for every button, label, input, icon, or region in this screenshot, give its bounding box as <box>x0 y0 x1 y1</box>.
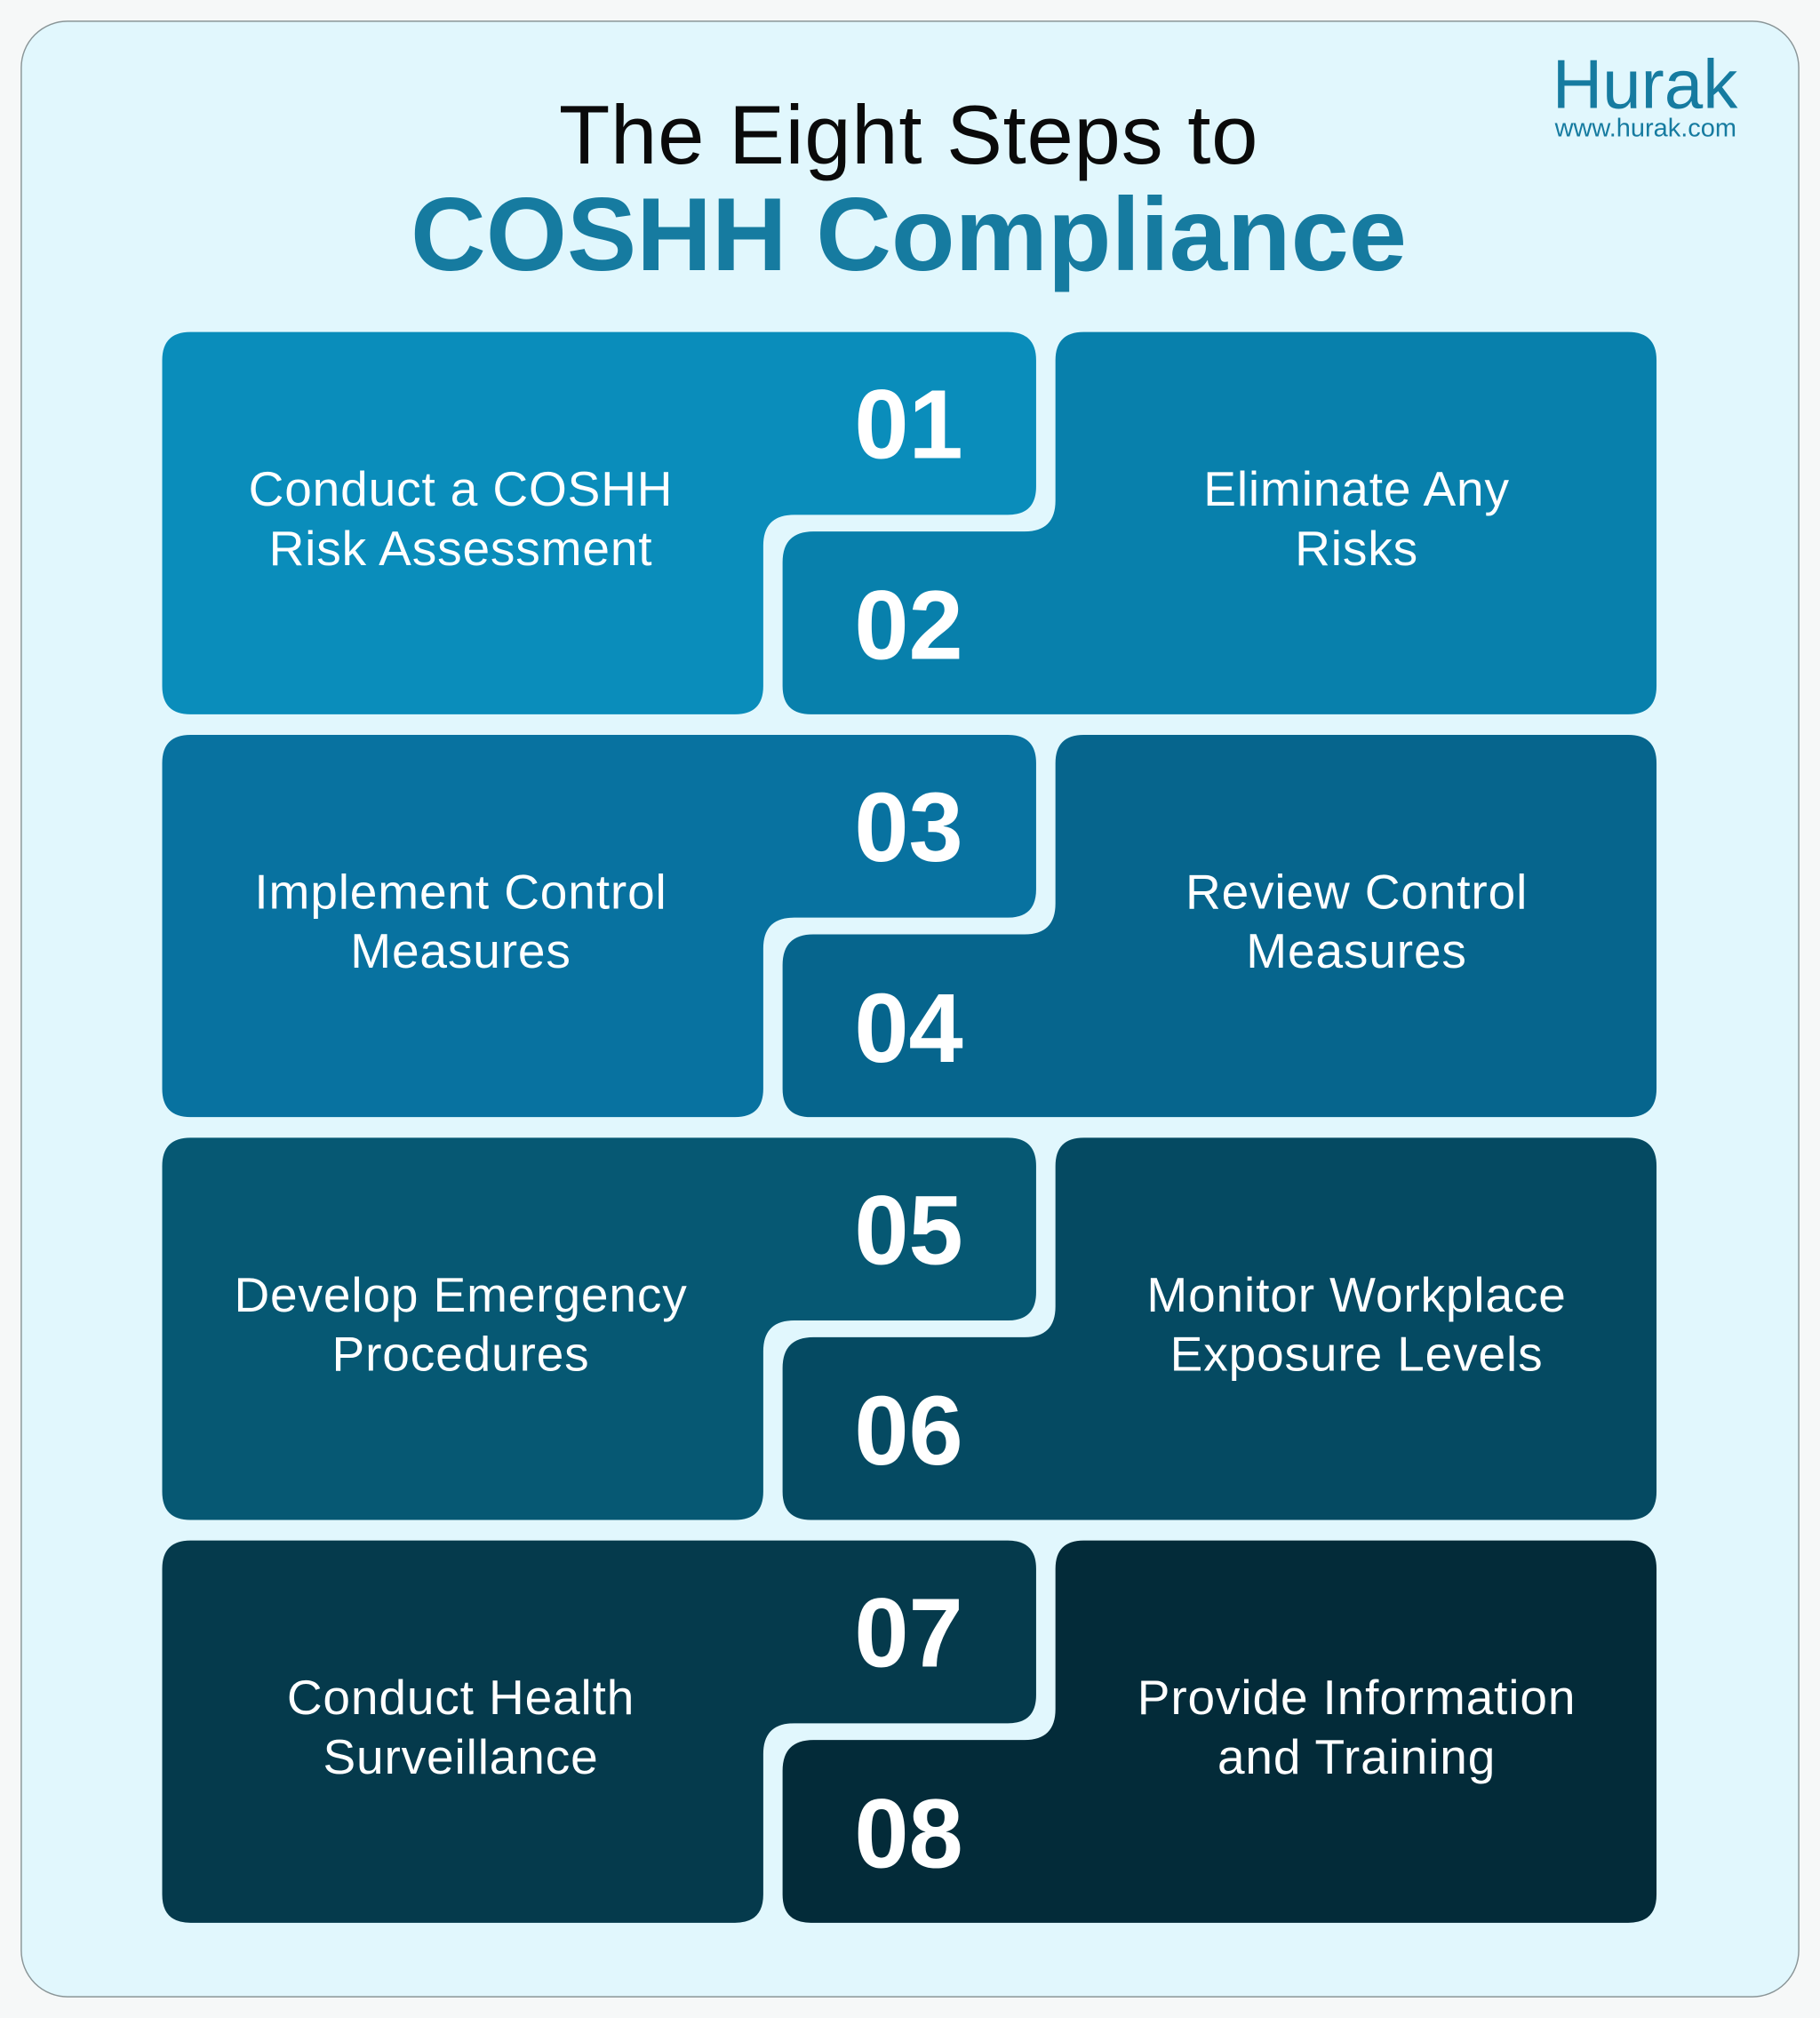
step 05 piece: Procedures <box>332 1326 590 1381</box>
step 04 piece <box>783 735 1656 1117</box>
row 4: steps 07-08 <box>163 1541 1656 1923</box>
step 02 piece: Eliminate Any <box>1203 461 1510 516</box>
step 08 piece <box>783 1541 1656 1923</box>
step 08 piece: Provide Information <box>1138 1670 1576 1725</box>
step 04 piece: Measures <box>1246 923 1467 978</box>
step 02 piece <box>783 332 1656 714</box>
step 03 piece <box>163 735 1036 1117</box>
title: COSHH Compliance <box>411 176 1407 292</box>
title: The Eight Steps to <box>559 88 1258 181</box>
step 03 piece: Measures <box>350 923 571 978</box>
step 07 piece: Conduct Health <box>287 1670 635 1725</box>
step 07 piece: 07 <box>854 1579 963 1688</box>
step 06 piece: Exposure Levels <box>1170 1326 1543 1381</box>
step 01 piece: 01 <box>854 371 963 480</box>
step 06 piece <box>783 1137 1656 1519</box>
logo: Hurak: www.hurak.com <box>1554 115 1736 143</box>
step 04 piece: Review Control <box>1185 865 1528 920</box>
step 02 piece: Risks <box>1295 521 1418 576</box>
step 06 piece: Monitor Workplace <box>1146 1267 1567 1322</box>
step 05 piece: Develop Emergency <box>234 1267 688 1322</box>
step 02 piece: 02 <box>854 571 963 681</box>
step 01 piece: Conduct a COSHH <box>249 461 673 516</box>
step 07 piece <box>163 1541 1036 1923</box>
step 05 piece <box>163 1137 1036 1519</box>
row 2: steps 03-04 <box>163 735 1656 1117</box>
step 03 piece: Implement Control <box>254 865 667 920</box>
row 1: steps 01-02 <box>163 332 1656 714</box>
step 01 piece <box>163 332 1036 714</box>
step 03 piece: 03 <box>854 773 963 882</box>
step 08 piece: and Training <box>1217 1729 1496 1784</box>
step 07 piece: Surveillance <box>323 1729 599 1784</box>
logo: Hurak: Hurak <box>1553 45 1738 124</box>
step 06 piece: 06 <box>854 1376 963 1486</box>
step 01 piece: Risk Assessment <box>269 521 652 576</box>
step 08 piece: 08 <box>854 1780 963 1889</box>
step 05 piece: 05 <box>854 1176 963 1285</box>
title <box>411 88 1407 292</box>
step 04 piece: 04 <box>854 974 963 1083</box>
row 3: steps 05-06 <box>163 1137 1656 1519</box>
